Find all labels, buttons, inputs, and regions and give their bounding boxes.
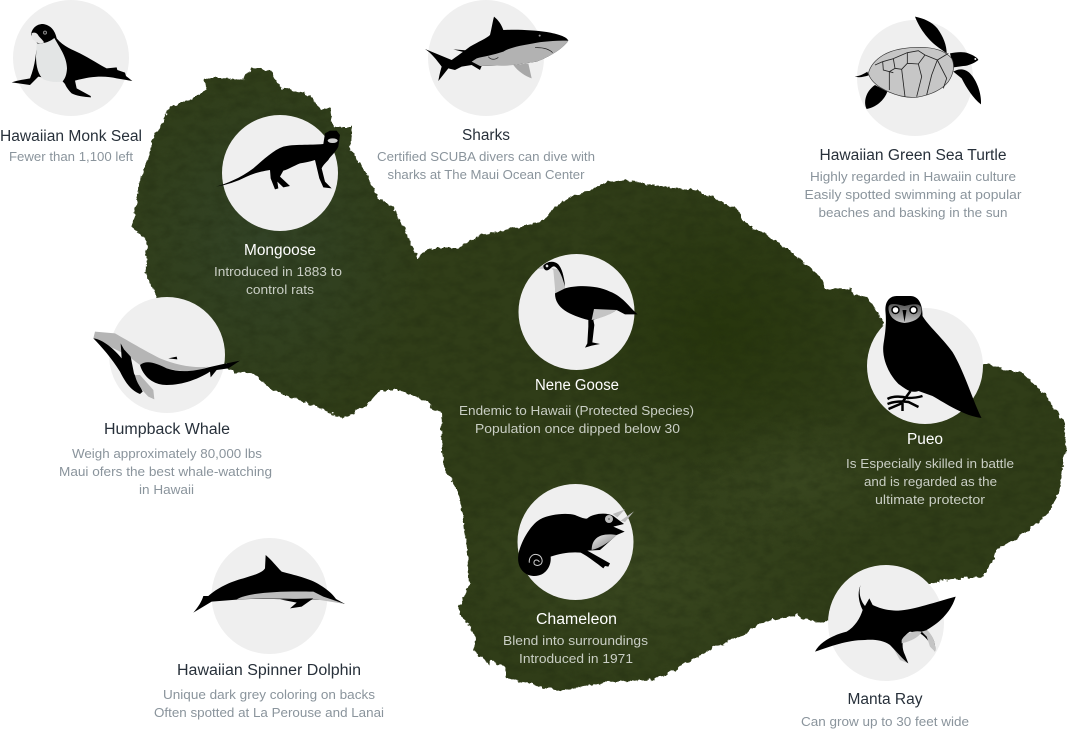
text: owl facts: Is Especially skilled in battle: [846, 457, 1014, 471]
text: goose facts: [459, 404, 694, 436]
text: chameleon facts: Blend into surroundings: [503, 634, 648, 648]
heading: Hawaiian Monk Seal: Hawaiian Monk Seal: [0, 128, 142, 145]
heading: Pueo: Pueo: [907, 431, 943, 448]
text: whale facts: [59, 447, 272, 497]
text: dolphin facts: [154, 688, 384, 720]
icon: chameleon: [518, 509, 634, 576]
icon circle: shark: [428, 0, 544, 116]
icon: dolphin: [193, 555, 345, 613]
icon circle: mongoose: [222, 115, 338, 231]
panel: Pueo: [846, 296, 1014, 507]
text: goose facts: Population once dipped below 30: [475, 422, 680, 436]
text: goose facts: Endemic to Hawaii (Protected Species): [459, 404, 694, 418]
text: owl facts: and is regarded as the: [864, 475, 997, 489]
text: seal fact: Fewer than 1,100 left: [9, 150, 134, 164]
panel: Chameleon: [503, 484, 648, 666]
icon circle: manta ray: [828, 565, 944, 681]
heading: Humpback Whale: Humpback Whale: [104, 421, 230, 438]
icon: goose: [537, 262, 638, 348]
icon circle: dolphin: [212, 538, 328, 654]
text: mongoose facts: [214, 265, 342, 297]
text: shark fact: sharks at The Maui Ocean Center: [388, 168, 584, 182]
panel: Hawaiian Monk Seal: [0, 0, 142, 164]
panel: Manta Ray: [801, 565, 969, 729]
text: turtle facts: Highly regarded in Hawaiin culture: [810, 170, 1016, 184]
text: turtle facts: [804, 170, 1022, 220]
heading: Manta Ray: Manta Ray: [848, 691, 923, 708]
panel: Sharks: [377, 0, 595, 182]
text: owl facts: ultimate protector: [875, 493, 985, 507]
icon circle: owl: [867, 308, 983, 424]
heading: Hawaiian Green Sea Turtle: Hawaiian Green Sea Turtle: [820, 147, 1006, 164]
text: turtle facts: beaches and basking in the sun: [818, 206, 1008, 220]
panel: Hawaiian Green Sea Turtle: [804, 17, 1022, 220]
icon circle: chameleon: [518, 484, 634, 600]
text: shark fact: Certified SCUBA divers can dive with: [377, 150, 595, 164]
icon circle: whale: [109, 297, 225, 413]
text: turtle facts: Easily spotted swimming at popular: [804, 188, 1022, 202]
icon circle: seal: [13, 0, 129, 116]
text: owl facts: [846, 457, 1014, 507]
icon: turtle: [855, 17, 981, 109]
text: mongoose facts: Introduced in 1883 to: [214, 265, 342, 279]
icon: owl: [883, 296, 982, 418]
heading: Sharks: Sharks: [462, 127, 510, 144]
icon: shark: [425, 17, 568, 81]
panel: Humpback Whale: [59, 297, 272, 497]
panel: Hawaiian Spinner Dolphin: [154, 538, 384, 720]
heading: Hawaiian Spinner Dolphin: Hawaiian Spinner Dolphin: [177, 662, 361, 679]
text: chameleon facts: [503, 634, 648, 666]
text: dolphin facts: Often spotted at La Perouse and Lanai: [154, 706, 384, 720]
icon circle: goose: [518, 254, 634, 370]
text: whale facts: in Hawaii: [139, 483, 194, 497]
heading: Mongoose: Mongoose: [244, 242, 316, 259]
panel: Mongoose: [214, 115, 342, 297]
text: dolphin facts: Unique dark grey coloring on backs: [163, 688, 375, 702]
icon: seal: [12, 24, 132, 97]
icon circle: turtle: [857, 20, 973, 136]
text: manta fact: Can grow up to 30 feet wide: [801, 715, 969, 729]
text: mongoose facts: control rats: [246, 283, 314, 297]
heading: Nene Goose: Nene Goose: [535, 377, 619, 394]
text: whale facts: Maui ofers the best whale-watching: [59, 465, 272, 479]
panel: Nene Goose: [459, 254, 694, 436]
icon: whale: [93, 332, 240, 399]
text: chameleon facts: Introduced in 1971: [519, 652, 633, 666]
text: shark fact: [377, 150, 595, 182]
text: whale facts: Weigh approximately 80,000 lbs: [72, 447, 262, 461]
heading: Chameleon: Chameleon: [536, 611, 617, 628]
icon: manta ray: [815, 585, 956, 663]
icon: mongoose: [216, 131, 340, 189]
